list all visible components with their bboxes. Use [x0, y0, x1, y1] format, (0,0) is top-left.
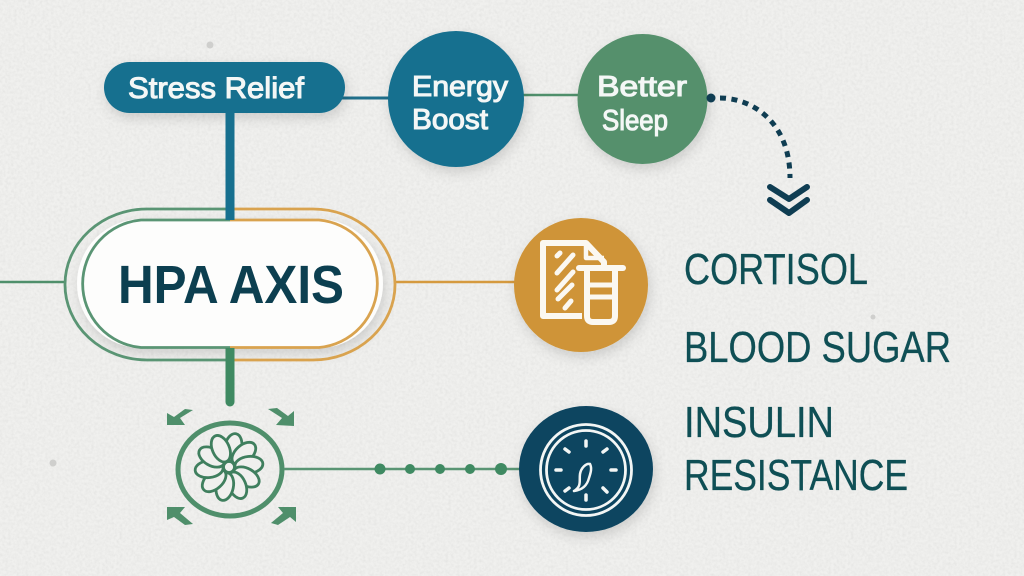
icon: gauge — [519, 406, 653, 532]
label: stress relief: Stress Relief — [128, 72, 305, 105]
label: better sleep: Better — [597, 71, 687, 103]
label: better sleep: Sleep — [602, 105, 668, 137]
connector: stress relief to energy boost — [340, 96, 392, 100]
circle: better sleep — [578, 34, 708, 164]
label: energy boost: Boost — [412, 104, 488, 136]
connector: left input line — [0, 281, 66, 283]
connector: energy boost to better sleep — [520, 94, 582, 96]
label: energy boost: Energy — [412, 71, 509, 103]
label: cortisol: CORTISOL — [684, 245, 868, 294]
circle: energy boost — [388, 31, 524, 167]
gauge needle — [574, 464, 591, 491]
gauge rings — [540, 424, 632, 516]
heading: HPA axis: HPA AXIS — [118, 255, 344, 315]
icon: gold document and beaker — [514, 218, 648, 352]
ring: flower circle — [178, 423, 282, 516]
pill: HPA axis — [65, 209, 395, 360]
ring: green left half — [65, 209, 230, 360]
icon: document hatching — [557, 253, 573, 308]
icon: beaker — [579, 268, 623, 322]
connector: HPA axis to gold icon — [394, 281, 516, 283]
gauge ticks — [556, 441, 616, 500]
icon: document — [543, 243, 604, 316]
text list: outcomes — [684, 245, 951, 500]
connector: stress relief to HPA axis — [226, 110, 234, 220]
icon: flower with arrows — [167, 408, 296, 525]
connector: flower to gauge with dots — [284, 463, 522, 475]
label: insulin resistance: INSULIN — [684, 398, 834, 447]
pill: stress relief — [104, 62, 345, 113]
label: insulin resistance: RESISTANCE — [684, 451, 908, 500]
icon: flower petals — [194, 432, 264, 502]
arrows: four corners — [167, 408, 296, 525]
icon: double chevron — [770, 187, 807, 213]
ring: gold right half — [230, 209, 395, 360]
connector: HPA axis to flower icon — [226, 348, 234, 406]
arrow: dashed curve to chevrons — [706, 94, 807, 213]
label: blood sugar: BLOOD SUGAR — [684, 323, 951, 372]
